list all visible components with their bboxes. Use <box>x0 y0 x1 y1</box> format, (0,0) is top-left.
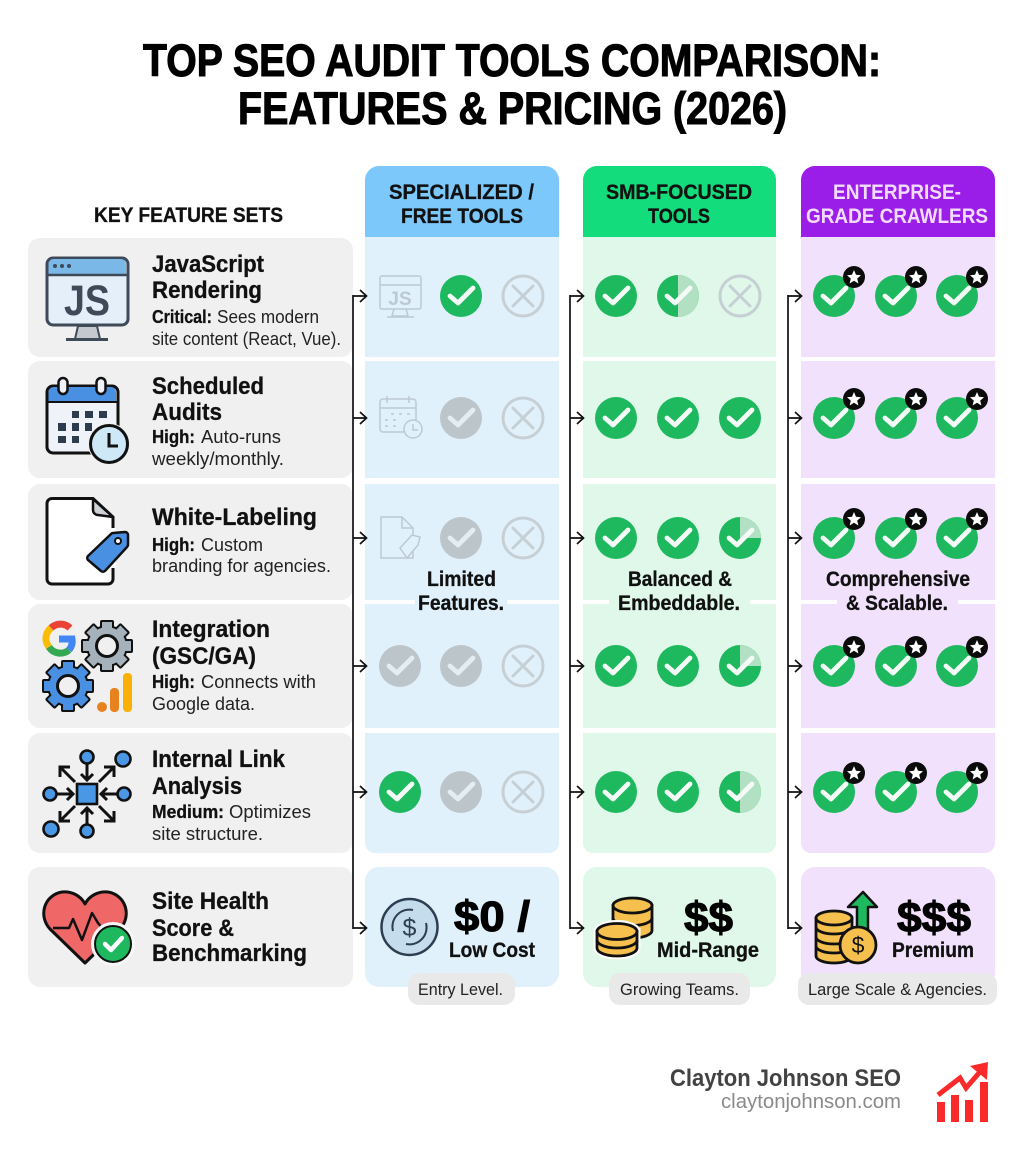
price: mid-range: Mid-Range <box>657 939 759 962</box>
feature row: site health score: Score & <box>152 915 234 942</box>
feature row: scheduled audits: weekly/monthly. <box>151 449 284 469</box>
price: free / low cost: $0 / <box>454 893 530 941</box>
feature row: internal link analysis: Optimizes <box>229 802 311 822</box>
price: premium: $$$ <box>897 894 971 942</box>
callout: limited features: Features. <box>418 592 504 615</box>
footer credit: Clayton Johnson SEO <box>670 1065 901 1092</box>
connector arrows: enterprise column <box>788 290 802 934</box>
pill: large scale and agencies <box>798 973 997 1005</box>
callout: comprehensive and scalable: & Scalable. <box>846 592 948 615</box>
column header: enterprise-grade crawlers <box>801 166 995 237</box>
callout: balanced and embeddable: Balanced & <box>628 568 732 591</box>
price: premium <box>816 892 974 963</box>
feature row: internal link analysis <box>28 733 353 853</box>
price: mid-range: $$ <box>684 894 733 942</box>
icon: Google logo, gears and analytics bars <box>42 620 133 712</box>
feature row: JavaScript rendering: Critical: <box>152 307 212 327</box>
feature row: JavaScript rendering: site content (React, Vue). <box>152 329 341 349</box>
feature row: scheduled audits: Audits <box>152 399 222 426</box>
column header: SMB-focused tools: SMB-FOCUSED <box>606 181 752 204</box>
pill: entry level <box>408 973 515 1005</box>
icon: silver coin: $ <box>403 914 417 942</box>
icon: JS monitor <box>47 258 128 340</box>
panel: SMB-focused tools column <box>583 166 776 987</box>
feature row: integration: Google data. <box>152 694 255 714</box>
feature row: white-labeling: High: <box>152 535 195 555</box>
feature row: internal link analysis: Analysis <box>152 773 242 800</box>
heading: key feature sets: KEY FEATURE SETS <box>94 204 283 227</box>
feature row: integration: High: <box>152 672 195 692</box>
icon: calendar with clock <box>47 378 130 465</box>
footer credit <box>670 1065 901 1113</box>
column header: enterprise-grade crawlers: GRADE CRAWLERS <box>806 205 988 228</box>
panel: enterprise-grade crawlers column <box>801 166 995 987</box>
feature row: JavaScript rendering: Rendering <box>152 277 262 304</box>
column header: enterprise-grade crawlers: ENTERPRISE- <box>833 181 961 204</box>
icon: coins with growth arrow: $ <box>852 932 865 958</box>
icon: coins with growth arrow <box>816 892 877 963</box>
feature row: white-labeling: White-Labeling <box>152 504 317 531</box>
icon: faded calendar <box>380 396 422 438</box>
column header: specialized / free tools: FREE TOOLS <box>401 205 523 228</box>
feature row: integration: Connects with <box>201 672 316 692</box>
column header: SMB-focused tools <box>583 166 776 237</box>
feature row: white-labeling: Custom <box>201 535 263 555</box>
status marks: enterprise column <box>813 266 988 813</box>
callout: balanced and embeddable <box>618 568 740 615</box>
feature row: scheduled audits: Scheduled <box>152 373 264 400</box>
feature row: JavaScript rendering <box>28 238 353 357</box>
status marks: specialized column <box>379 275 543 813</box>
feature row: scheduled audits: Auto-runs <box>201 427 281 447</box>
icon: silver coin <box>382 899 438 955</box>
icon: faded document <box>381 517 420 558</box>
pill: large scale and agencies: Large Scale & Agencies. <box>808 980 987 999</box>
feature row: internal link analysis: Internal Link <box>152 746 286 773</box>
callout: limited features <box>418 568 504 615</box>
callout: balanced and embeddable: Embeddable. <box>618 592 740 615</box>
feature row: site health score <box>28 867 353 987</box>
column header: SMB-focused tools: TOOLS <box>648 205 710 228</box>
title: FEATURES & PRICING (2026) <box>238 83 787 134</box>
callout: comprehensive and scalable <box>826 568 970 615</box>
connector arrows: specialized column <box>353 290 366 934</box>
icon: heart with check <box>44 892 135 966</box>
title <box>143 35 881 134</box>
feature row: site health score: Site Health <box>152 888 269 915</box>
icon: JS monitor: JS <box>64 277 110 325</box>
feature row: JavaScript rendering: Sees modern <box>217 307 319 327</box>
pill: entry level: Entry Level. <box>418 980 503 999</box>
callout: comprehensive and scalable: Comprehensive <box>826 568 970 591</box>
price: premium: Premium <box>892 939 974 962</box>
price: free / low cost <box>382 893 535 962</box>
pill: growing teams: Growing Teams. <box>620 980 739 999</box>
icon: document with tag <box>47 498 128 584</box>
feature row: JavaScript rendering: JavaScript <box>152 251 264 278</box>
icon: faded JS monitor: JS <box>388 289 412 310</box>
icon: faded JS monitor <box>380 276 421 317</box>
title: TOP SEO AUDIT TOOLS COMPARISON: <box>143 35 881 86</box>
feature row: white-labeling <box>28 484 353 600</box>
feature row: white-labeling: branding for agencies. <box>152 556 331 576</box>
icon: red growth chart logo <box>937 1062 988 1122</box>
status marks: SMB column <box>595 275 761 813</box>
feature row: scheduled audits <box>28 361 353 478</box>
price: mid-range <box>597 894 759 962</box>
feature row: internal link analysis: Medium: <box>152 802 224 822</box>
price: free / low cost: Low Cost <box>449 939 535 962</box>
callout: limited features: Limited <box>427 568 496 591</box>
feature row: site health score: Benchmarking <box>152 940 307 967</box>
column header: specialized / free tools <box>365 166 559 237</box>
feature row: scheduled audits: High: <box>152 427 195 447</box>
column header: specialized / free tools: SPECIALIZED / <box>389 181 534 204</box>
icon: gold coin stacks <box>597 898 652 956</box>
icon: link network <box>44 750 130 838</box>
footer credit: claytonjohnson.com <box>721 1091 901 1113</box>
feature row: internal link analysis: site structure. <box>152 824 263 844</box>
pill: growing teams <box>609 973 750 1005</box>
panel: specialized / free tools column <box>365 166 559 987</box>
connector arrows: SMB column <box>570 290 584 934</box>
feature row: integration: Integration <box>152 616 270 643</box>
feature row: integration <box>28 604 353 728</box>
feature row: integration: (GSC/GA) <box>152 643 256 670</box>
